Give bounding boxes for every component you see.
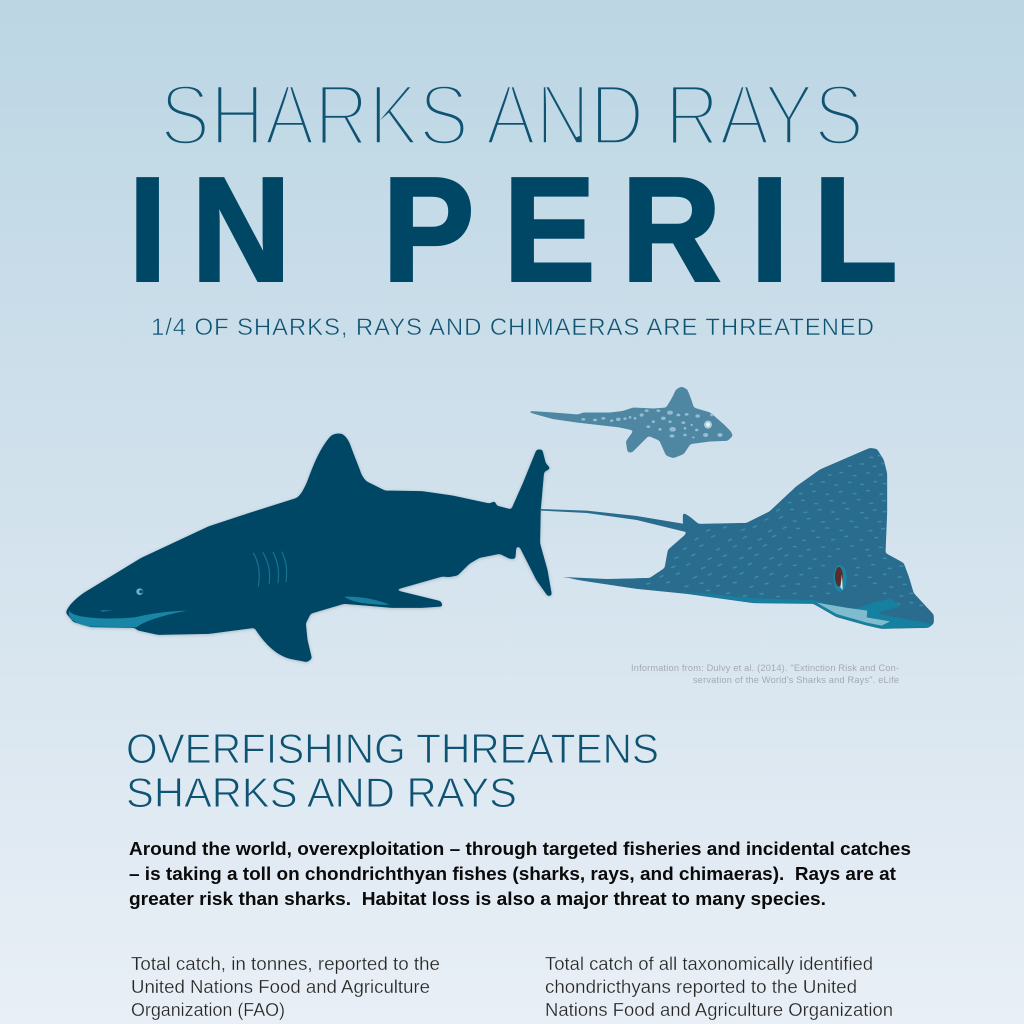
ray body [563,448,933,628]
subtitle: 1/4 OF SHARKS, RAYS AND CHIMAERAS ARE THREATENED [151,314,874,341]
ray rear wing tip [563,577,653,589]
title: in peril: IN PERIL [0,148,898,313]
ray tail [541,509,688,533]
section heading: SHARKS AND RAYS [126,769,517,816]
left chart caption: Organization (FAO) [131,1000,285,1020]
ray eye [833,565,847,592]
shark mouth and belly [69,611,187,627]
right chart caption: Nations Food and Agriculture Organization [545,1000,893,1020]
section heading [126,725,659,816]
section heading: OVERFISHING THREATENS [126,725,659,772]
right chart caption: chondricthyans reported to the United [545,977,857,997]
intro paragraph: Around the world, overexploitation – through targeted fisheries and incidental catches [129,839,911,859]
ray spots [647,456,923,605]
ray underside band [637,587,933,628]
credit: servation of the World's Sharks and Rays". eLife [693,675,899,685]
title: sharks and rays: SHARKS AND RAYS [160,67,864,163]
ray belly highlight [817,603,890,626]
shark eye [136,588,143,595]
right chart caption: Total catch of all taxonomically identified [545,954,873,974]
credit: Information from: Dulvy et al. (2014). "Extinction Risk and Con- [631,663,899,673]
left chart caption [131,954,440,1020]
shark pelvic fin highlight [344,597,390,605]
shark gills [254,552,287,586]
chimaera eye [704,421,712,429]
intro paragraph: greater risk than sharks. Habitat loss is also a major threat to many species. [129,889,826,909]
illustration: eagle ray [541,448,933,628]
shark nostril [100,610,113,612]
left chart caption: Total catch, in tonnes, reported to the [131,954,440,974]
right chart caption [545,954,893,1020]
left chart caption: United Nations Food and Agriculture [131,977,430,997]
illustration: chimaera [529,387,732,457]
intro paragraph [129,839,911,909]
credit [631,663,899,685]
illustration: shark [66,434,551,662]
intro paragraph: – is taking a toll on chondrichthyan fishes (sharks, rays, and chimaeras). Rays are at [129,864,896,884]
